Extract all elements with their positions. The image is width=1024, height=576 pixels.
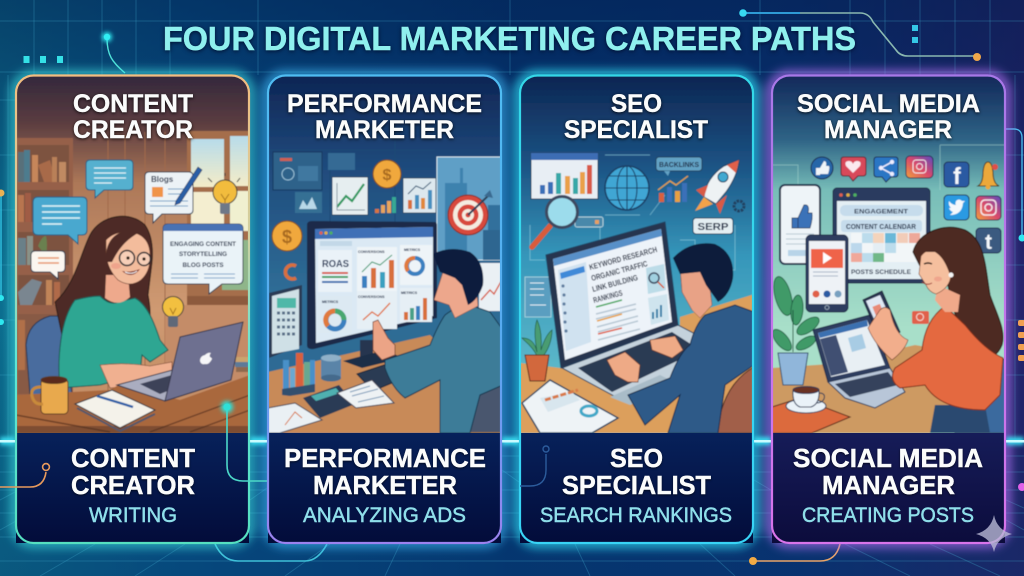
window callout: ENGAGING CONTENT (170, 241, 236, 248)
circuit: top left (102, 32, 125, 73)
heading: seo specialist: SPECIALIST (564, 116, 708, 144)
screen text: RANKINGS (592, 288, 624, 305)
caption: performance marketer: PERFORMANCE (284, 443, 486, 473)
woman: hair back (55, 216, 152, 345)
bottom panel: performance marketer (268, 433, 501, 543)
heading: social media manager (797, 90, 980, 144)
heading: seo specialist (564, 90, 708, 144)
title: FOUR DIGITAL MARKETING CAREER PATHS (163, 21, 856, 58)
chair (464, 343, 503, 433)
laptop (117, 322, 243, 401)
illustration: content creator at desk (15, 75, 251, 435)
icon: globe (605, 166, 649, 210)
circuit: left side (0, 190, 4, 325)
doc panel (525, 277, 551, 317)
tablet (522, 380, 618, 433)
illustration: seo at laptop (519, 75, 755, 435)
screen text: KEYWORD RESEARCH (588, 245, 658, 272)
caption: content creator: CREATOR (71, 470, 195, 500)
woman: hand on keys (100, 362, 172, 388)
circuit: orange line into card (0, 464, 49, 487)
label: backlinks (656, 157, 702, 176)
book (772, 398, 850, 433)
chart: bars lower: METRICS (401, 291, 418, 295)
screen tiles (646, 264, 669, 325)
desk (772, 345, 1006, 433)
screen text: LINK BUILDING (591, 273, 639, 294)
books right (235, 357, 250, 372)
illustration: social manager with phone (769, 75, 1007, 435)
card border: performance marketer (268, 76, 501, 543)
squares: top left (24, 56, 63, 63)
card border: content creator (16, 76, 249, 543)
woman: neck and face (105, 231, 150, 303)
man: hand pointing (373, 320, 395, 360)
man: head (673, 243, 733, 318)
icon: instagram (976, 196, 1001, 220)
man: shirt (628, 305, 754, 433)
plant (522, 320, 552, 381)
chart: trend: CONVERSIONS (358, 295, 385, 299)
icon: light bulb top (208, 173, 240, 214)
man: hands (607, 336, 683, 382)
icon: twitter (944, 195, 969, 220)
phone in hand (863, 291, 908, 360)
circuit: bottom connector (215, 544, 327, 561)
sidebar (558, 262, 591, 351)
icon: sparkle watermark (976, 515, 1012, 552)
caption: performance marketer: ANALYZING ADS (303, 504, 466, 527)
heading: social media manager: SOCIAL MEDIA (797, 90, 980, 118)
metric: roas: ROAS (322, 258, 349, 270)
laptop screen (546, 222, 678, 368)
circuit: bottom right (749, 483, 1024, 565)
bubble: speech blue large (33, 197, 87, 244)
icon: facebook (944, 162, 969, 189)
panel: seo specialist (519, 75, 755, 543)
monitor stand (343, 340, 403, 368)
small social icon (912, 311, 929, 324)
caption: content creator: WRITING (89, 504, 177, 527)
caption: social media manager: SOCIAL MEDIA (793, 443, 983, 473)
heading: performance marketer: PERFORMANCE (287, 90, 482, 118)
chart: growth (658, 176, 688, 202)
cup and saucer (786, 386, 826, 413)
icon: coin left: $ (282, 227, 292, 247)
window callout (163, 224, 243, 294)
man: shirt (385, 305, 503, 433)
heading: content creator: CONTENT (73, 90, 193, 118)
panel: content creator (0, 75, 267, 543)
icon: coin top: $ (383, 167, 392, 184)
chart card green arrow (332, 177, 368, 215)
icon: heart (841, 157, 866, 181)
bubble: speech blue small (86, 160, 133, 198)
small bars (375, 197, 396, 213)
desk (520, 294, 755, 433)
calculator (303, 385, 355, 418)
panel: social media manager (769, 75, 1007, 543)
chair (26, 316, 72, 395)
bubble: blogs (145, 167, 202, 223)
icon: share (874, 157, 898, 182)
bottom panel: seo specialist (520, 433, 753, 543)
desk (269, 334, 440, 433)
screen text: ORGANIC TRAFFIC (590, 259, 649, 283)
woman: jeans (930, 405, 990, 433)
window: content calendar: ENGAGEMENT (854, 208, 908, 216)
card border: social media manager (772, 76, 1005, 543)
chart: conversions: CONVERSIONS (358, 250, 385, 254)
window: content calendar: POSTS SCHEDULE (851, 269, 912, 276)
bookshelf (16, 138, 73, 403)
window: content calendar: CONTENT CALENDAR (846, 224, 916, 231)
phone: video (806, 235, 848, 312)
icon: tumblr: t (985, 231, 992, 254)
icon: magnifier (532, 196, 578, 247)
heading: content creator (73, 90, 193, 144)
plant (769, 275, 822, 385)
label: backlinks: BACKLINKS (659, 160, 699, 169)
screen bars (596, 300, 640, 340)
label: serp: SERP (698, 221, 728, 233)
icon: light bulb bottom (162, 296, 184, 327)
bottom panel: content creator (16, 433, 249, 543)
desk organizer (282, 353, 315, 396)
search bar (575, 217, 603, 227)
heading: seo specialist: SEO (611, 90, 662, 118)
glow: card halos (15, 75, 1006, 543)
icon: tumblr (976, 228, 1001, 254)
window callout: STORYTELLING (179, 251, 227, 258)
bottom panel: social media manager (772, 433, 1005, 543)
chart: donut left: METRICS (322, 300, 339, 304)
caption: seo specialist: SEARCH RANKINGS (540, 504, 732, 527)
icon: coin top (373, 160, 401, 188)
dashboard panels (318, 245, 432, 333)
report (268, 403, 322, 433)
icon: like (811, 157, 833, 179)
icon: facebook: f (953, 163, 961, 189)
laptop (813, 315, 905, 408)
mug (32, 376, 68, 414)
bubble: white note (31, 251, 65, 279)
caption: performance marketer: MARKETER (313, 470, 457, 500)
wall panels (273, 152, 355, 213)
circuit: right side (1006, 129, 1024, 361)
wall under window (164, 304, 248, 362)
chart card bars (403, 178, 436, 213)
icon: coin left (272, 221, 302, 251)
phone: like (780, 185, 820, 264)
caption: content creator (71, 443, 195, 527)
chart: donut right: METRICS (404, 248, 421, 252)
keyboard (357, 358, 418, 391)
calendar grid (851, 233, 920, 262)
bubble: blogs: Blogs (151, 175, 174, 184)
caption: performance marketer (284, 443, 486, 527)
caption: social media manager (793, 443, 983, 527)
woman: face (918, 233, 966, 312)
circuit: node line through card (221, 401, 267, 481)
window callout: BLOG POSTS (182, 262, 224, 269)
icon: gear (734, 201, 744, 211)
heading: performance marketer (287, 90, 482, 144)
small c icon (285, 265, 296, 279)
heading: performance marketer: MARKETER (315, 116, 454, 144)
cylinder (321, 354, 341, 382)
icon: rocket (695, 160, 739, 214)
illustration: analyst at monitor (267, 75, 503, 435)
calculator screen (269, 285, 302, 358)
icon: target (448, 190, 493, 235)
card border: seo specialist (520, 76, 753, 543)
chair (955, 358, 1006, 433)
caption: social media manager: CREATING POSTS (802, 504, 974, 527)
caption: seo specialist (540, 443, 732, 527)
circuit inside seo (520, 446, 549, 486)
woman: shirt (59, 296, 168, 388)
chair (717, 367, 754, 433)
man: head (433, 249, 483, 318)
squares: top right (912, 25, 918, 43)
notebook (75, 390, 155, 431)
icon: bell (978, 162, 999, 190)
panel: performance marketer (267, 75, 503, 543)
caption: seo specialist: SPECIALIST (562, 470, 711, 500)
desk (16, 375, 250, 434)
caption: seo specialist: SEO (610, 443, 663, 473)
label: serp (693, 218, 733, 234)
paper (337, 380, 394, 408)
city window (437, 157, 503, 260)
chart screen behind (479, 263, 503, 311)
woman: shirt (892, 306, 1003, 410)
window: content calendar (833, 188, 930, 283)
monitor (307, 221, 437, 349)
screen text (588, 245, 658, 305)
heading: social media manager: MANAGER (824, 116, 952, 144)
woman: hair back (913, 227, 1003, 357)
caption: content creator: CONTENT (71, 443, 195, 473)
heading: content creator: CREATOR (73, 116, 193, 144)
icon: instagram small (906, 156, 933, 178)
glow: bars between cards (0, 437, 1024, 445)
laptop base (562, 325, 730, 405)
chart window (531, 153, 598, 199)
caption: social media manager: MANAGER (822, 470, 955, 500)
circuit: top right (739, 9, 981, 61)
window (187, 131, 250, 309)
